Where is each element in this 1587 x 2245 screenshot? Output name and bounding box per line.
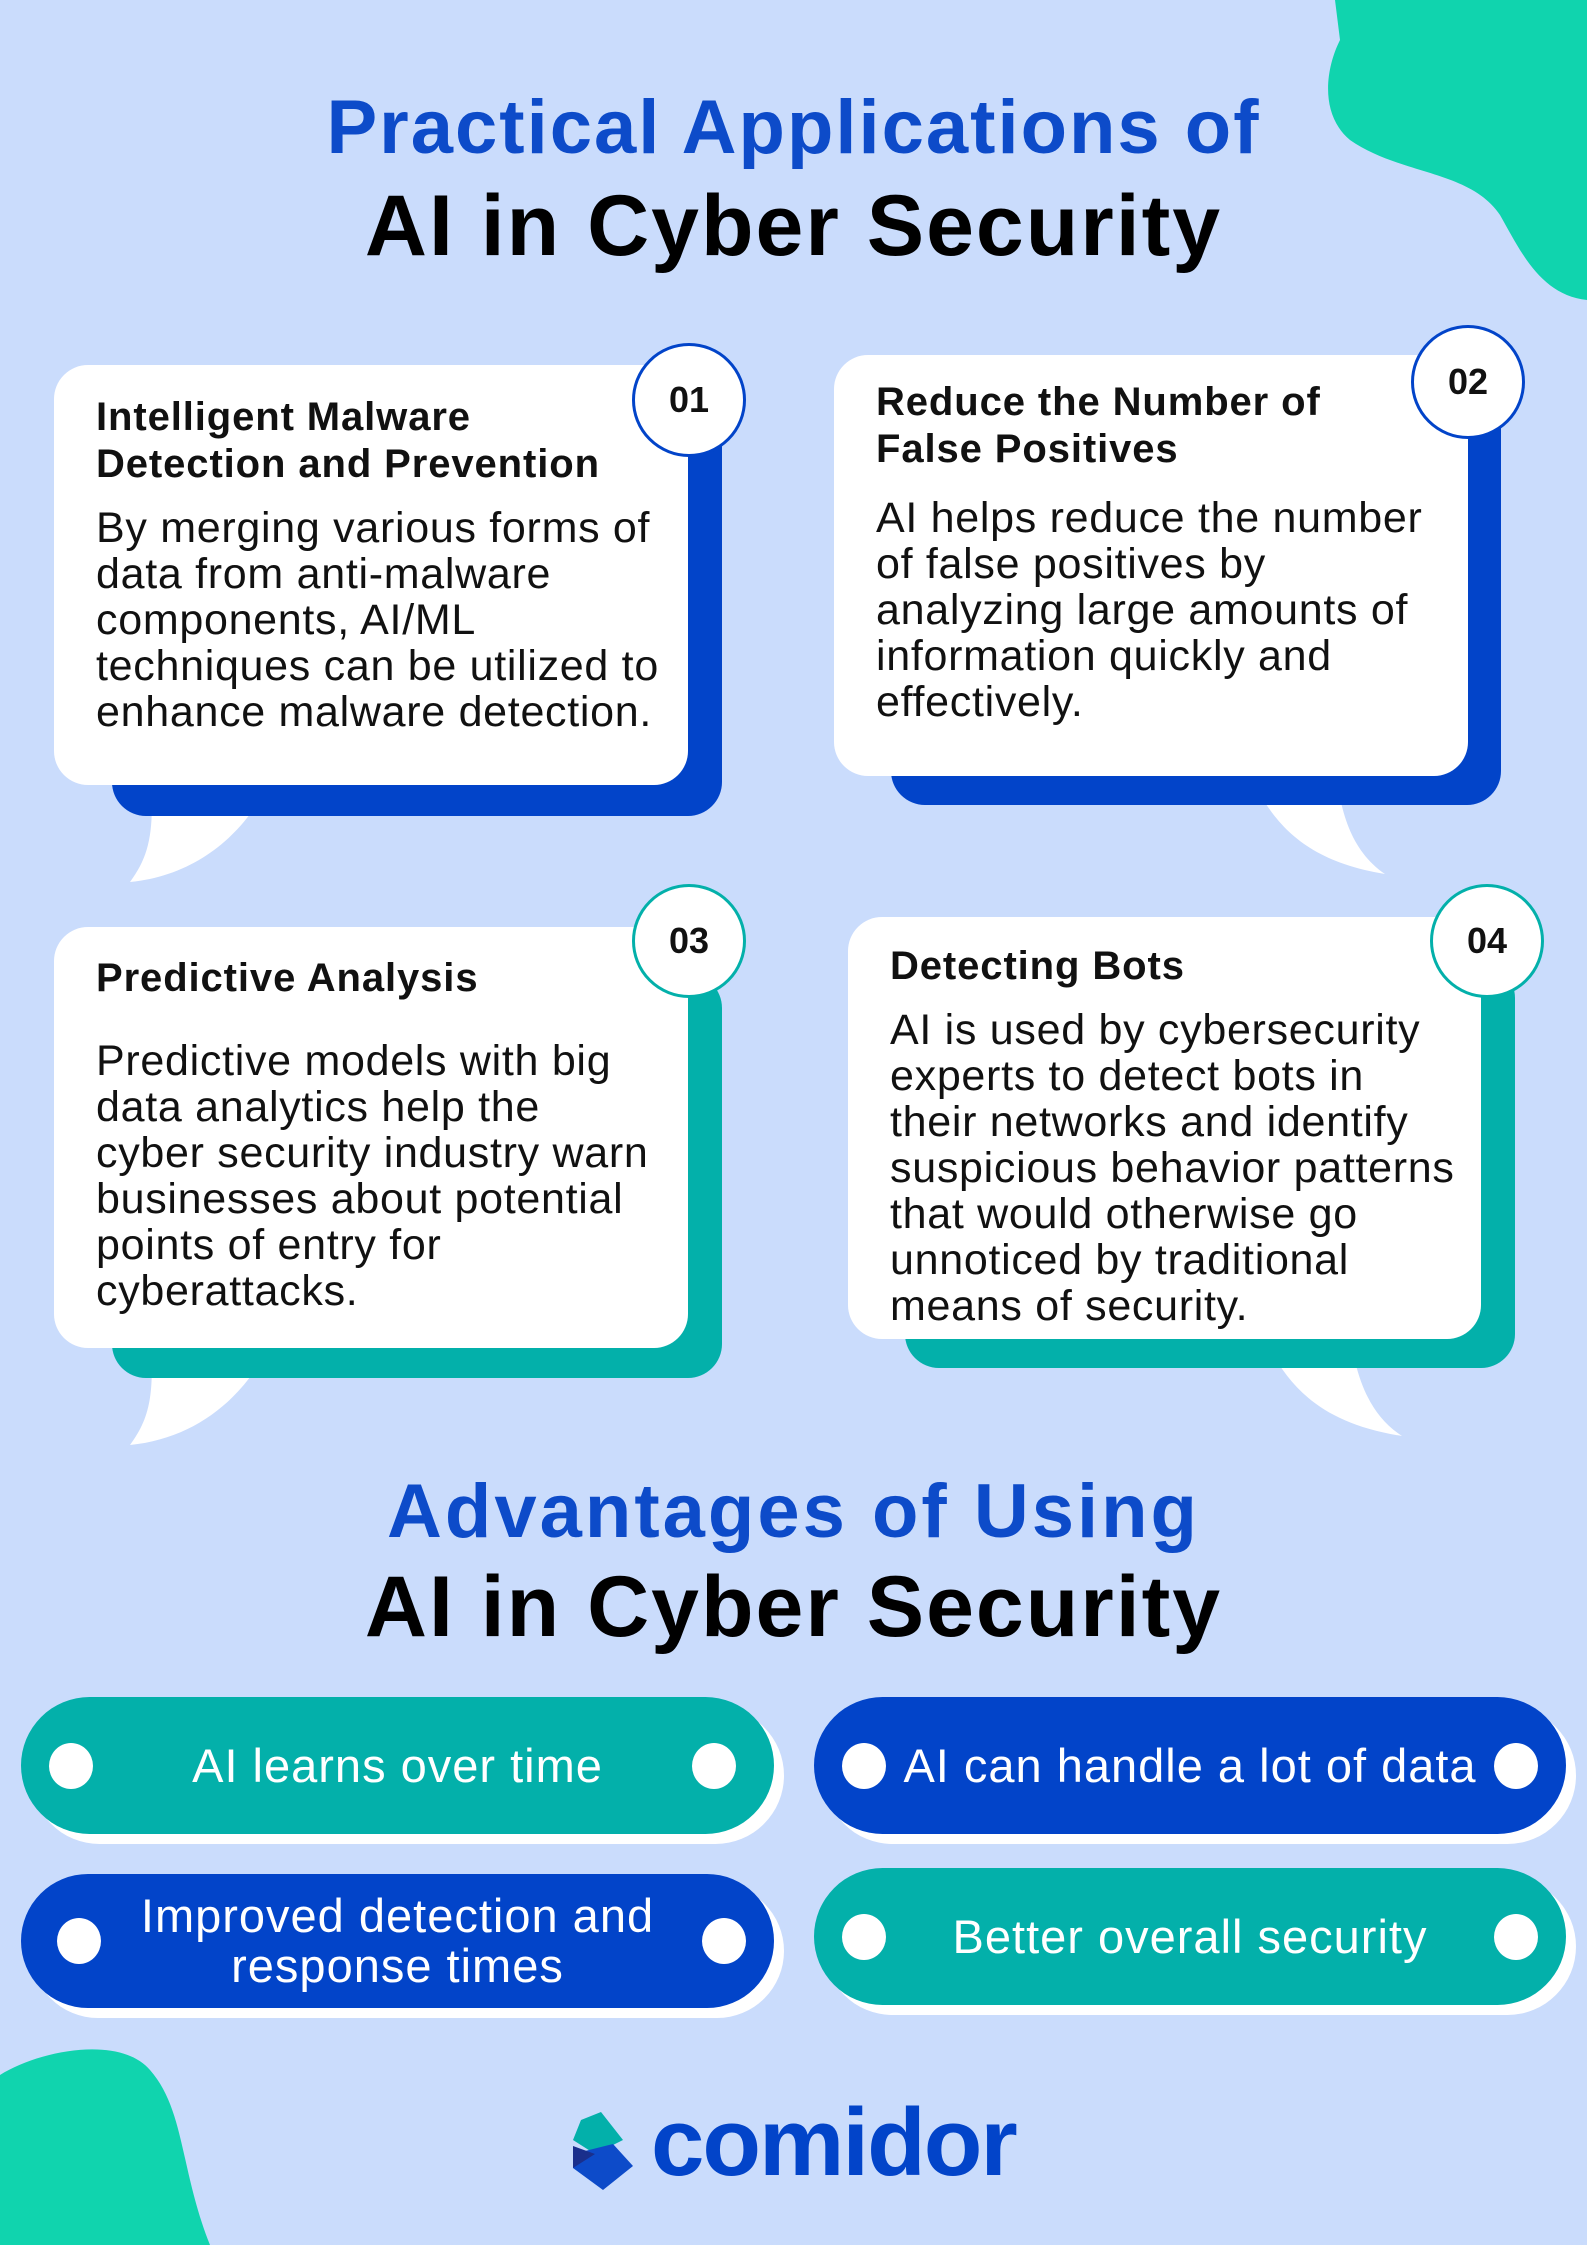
text 03: Predictive models with big — [96, 1037, 611, 1085]
text 01 — [96, 504, 659, 736]
pill: Better overall security — [814, 1868, 1576, 2015]
pill: AI can handle a lot of data: AI can handle a lot of data — [903, 1738, 1477, 1792]
title: AI in Cyber Security — [365, 178, 1222, 274]
text 02: analyzing large amounts of — [876, 586, 1408, 634]
text 04: that would otherwise go — [890, 1190, 1358, 1238]
pill: AI learns over time: AI learns over time — [192, 1738, 603, 1792]
text 03: cyber security industry warn — [96, 1129, 649, 1177]
text 02 — [876, 494, 1422, 726]
text 02: of false positives by — [876, 540, 1266, 588]
text 01: enhance malware detection. — [96, 688, 652, 736]
heading 02: Reduce the Number of — [876, 380, 1321, 424]
logo: comidor — [573, 2089, 1016, 2196]
heading 02: False Positives — [876, 427, 1179, 471]
section title: advantages — [365, 1469, 1222, 1655]
text 03: cyberattacks. — [96, 1267, 358, 1315]
text 04: unnoticed by traditional — [890, 1236, 1349, 1284]
panel 03 — [54, 884, 746, 1378]
text 04 — [890, 1006, 1455, 1330]
text 04: means of security. — [890, 1282, 1248, 1330]
badge 03: 03 — [669, 920, 709, 961]
pill: Improved detection and response times: response times — [231, 1939, 564, 1992]
heading 01 — [96, 395, 600, 486]
heading 03: Predictive Analysis — [96, 956, 478, 1000]
badge 01 — [632, 343, 746, 457]
heading 01: Intelligent Malware — [96, 395, 471, 439]
text 03: businesses about potential — [96, 1175, 623, 1223]
badge 04 — [1430, 884, 1544, 998]
badge 02 — [1411, 325, 1525, 439]
text 01: data from anti-malware — [96, 550, 551, 598]
text 02: AI helps reduce the number — [876, 494, 1422, 542]
text 02: information quickly and — [876, 632, 1332, 680]
icon: logo mark — [573, 2112, 633, 2190]
pill: Improved detection and response times — [21, 1874, 784, 2018]
text 03: points of entry for — [96, 1221, 442, 1269]
pill: Better overall security: Better overall security — [953, 1910, 1427, 1962]
text 01: components, AI/ML — [96, 596, 476, 644]
badge 03 — [632, 884, 746, 998]
panel 01 — [54, 343, 746, 816]
logo text: comidor — [651, 2089, 1016, 2196]
badge 04: 04 — [1467, 920, 1507, 961]
title — [326, 85, 1261, 274]
pill: AI can handle a lot of data — [814, 1697, 1576, 1844]
text 04: experts to detect bots in — [890, 1052, 1364, 1100]
heading 02 — [876, 380, 1321, 471]
badge 01: 01 — [669, 379, 709, 420]
panel 02 — [834, 325, 1525, 805]
text 02: effectively. — [876, 678, 1084, 726]
text 03 — [96, 1037, 649, 1315]
badge 02: 02 — [1448, 361, 1488, 402]
title: Practical Applications of — [326, 85, 1261, 170]
pill: Improved detection and response times: Improved detection and — [141, 1889, 654, 1942]
text 01: techniques can be utilized to — [96, 642, 659, 690]
heading 04: Detecting Bots — [890, 944, 1185, 988]
text 03: data analytics help the — [96, 1083, 540, 1131]
text 04: AI is used by cybersecurity — [890, 1006, 1420, 1054]
pill: AI learns over time — [21, 1697, 784, 1844]
text 04: their networks and identify — [890, 1098, 1408, 1146]
panel 04 — [848, 884, 1544, 1368]
heading 01: Detection and Prevention — [96, 442, 600, 486]
text 01: By merging various forms of — [96, 504, 650, 552]
section title: advantages: AI in Cyber Security — [365, 1559, 1222, 1655]
section title: advantages: Advantages of Using — [387, 1469, 1200, 1554]
text 04: suspicious behavior patterns — [890, 1144, 1455, 1192]
